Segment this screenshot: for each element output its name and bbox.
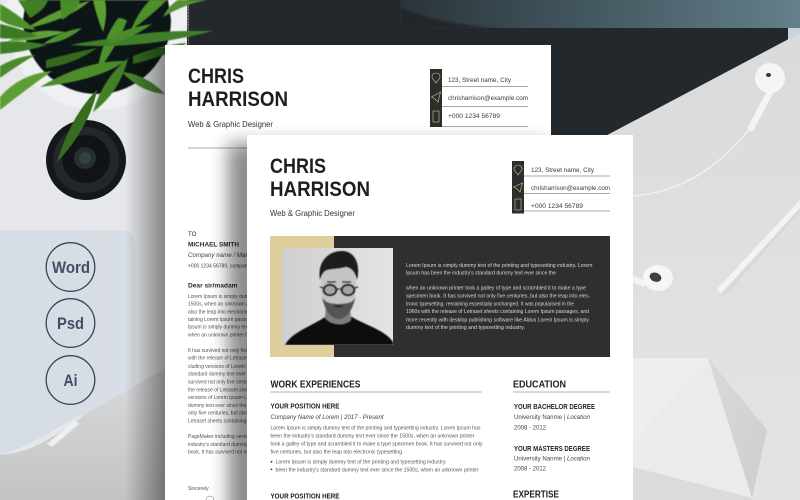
panel: front resume page bbox=[247, 135, 633, 500]
tablet sheet bbox=[0, 230, 135, 455]
lower grey sheet bbox=[0, 368, 165, 500]
job description bbox=[270, 426, 483, 455]
contact details bbox=[524, 167, 610, 211]
back page letter body: taining Lorem Ipsum passages bbox=[188, 317, 257, 323]
back page letter body: book. It has survived not only bbox=[188, 450, 253, 456]
profile banner bbox=[270, 236, 610, 357]
title: name: CHRIS bbox=[270, 155, 326, 178]
format badges bbox=[46, 243, 95, 404]
panel: back resume page bbox=[165, 45, 551, 500]
degree: masters bbox=[514, 446, 590, 472]
white paper pyramid bbox=[633, 358, 767, 500]
shadow cast by front page bbox=[228, 143, 551, 500]
back page recipient block: TO bbox=[188, 231, 197, 238]
degree: masters: University Nanme | Location bbox=[514, 456, 590, 462]
back page letter body: industry's standard dummy text bbox=[188, 442, 258, 448]
background: left white desk surface bbox=[0, 0, 165, 500]
degree: masters: YOUR MASTERS DEGREE bbox=[514, 446, 590, 453]
back page contact icon strip bbox=[430, 69, 442, 127]
badge: Word: Word bbox=[52, 259, 90, 277]
back page name bbox=[188, 65, 288, 111]
badge: Ai: Ai bbox=[64, 372, 78, 390]
education section bbox=[513, 380, 610, 500]
title: name: HARRISON bbox=[270, 178, 370, 201]
back page recipient block: +000 1234 56789, company@mail.com bbox=[188, 264, 275, 270]
back page contact details: 123, Street name, City bbox=[448, 77, 512, 84]
badge: Psd bbox=[46, 299, 95, 347]
back page letter body bbox=[188, 294, 266, 492]
back page job title: Web & Graphic Designer bbox=[188, 119, 273, 129]
back page letter body: 1500s, when an unknown printer bbox=[188, 302, 261, 308]
job description: took a galley of type and scrambled it to make a type specimen book. It has survived not only bbox=[270, 441, 483, 447]
background: light notebook on right bbox=[560, 33, 800, 500]
icon: plant in white pot bbox=[0, 0, 213, 162]
white stick bbox=[717, 200, 800, 297]
job title: Web & Graphic Designer bbox=[270, 208, 355, 218]
back page contact details: chrisharrison@example.com bbox=[448, 95, 528, 102]
profile text: tronic typesetting, remaining essentially unchanged. It was popularised in the bbox=[406, 301, 574, 307]
heading: education: EDUCATION bbox=[513, 380, 566, 390]
job description: five centuries, but also the leap into electronic typesetting. bbox=[270, 449, 404, 455]
back page letter body: Sincerely bbox=[188, 486, 209, 492]
contact details: chrisharrison@example.com bbox=[531, 185, 610, 192]
shadow left of back page bbox=[125, 48, 165, 500]
company line: Company Name of Lorem | 2017 - Present bbox=[270, 414, 384, 421]
profile text: more recently with desktop publishing software like Aldus Lorem Ipsum is simply bbox=[406, 317, 589, 323]
back page letter body: when an unknown printer took bbox=[188, 332, 255, 338]
job bullets: Lorem Ipsum is simply dummy text of the printing and typesetting industry. bbox=[276, 460, 446, 466]
earbud top bbox=[633, 63, 785, 196]
back page name: HARRISON bbox=[188, 88, 288, 111]
degree: bachelor: University Nanme | Location bbox=[514, 414, 590, 421]
job bullets: been the industry's standard dummy text ever since the 1500s, when an unknown printer bbox=[276, 467, 479, 473]
job bullets bbox=[271, 460, 479, 473]
back page letter body: with the release of Letraset sheets bbox=[188, 356, 265, 362]
profile text: specimen book. It has survived not only five centuries, but also the leap into elec- bbox=[406, 294, 590, 300]
back page contact details: +000 1234 56789 bbox=[448, 113, 500, 120]
heading: work experiences: WORK EXPERIENCES bbox=[270, 380, 361, 390]
back page recipient block: MICHAEL SMITH bbox=[188, 242, 239, 248]
back page letter body: survived not only five centuries bbox=[188, 379, 257, 385]
title: name bbox=[270, 155, 370, 201]
job description: Lorem Ipsum is simply dummy text of the printing and typesetting industry. Lorem Ipsum has bbox=[270, 426, 481, 432]
back page letter body: Lorem Ipsum is simply dummy text bbox=[188, 294, 266, 300]
back page letter body: only five centuries, but also the bbox=[188, 411, 257, 417]
back page letter body: PageMaker including versions bbox=[188, 434, 255, 440]
degree: bachelor bbox=[514, 404, 595, 432]
back page letter body: also the leap into electronic type bbox=[188, 309, 260, 315]
back page letter body: Ipsum is simply dummy text of bbox=[188, 325, 256, 331]
profile text: Ipsum has been the industry's standard dummy text ever since the bbox=[406, 270, 556, 276]
position heading: YOUR POSITION HERE bbox=[270, 404, 340, 411]
badge: Word bbox=[46, 243, 95, 291]
back page letter body: versions of Lorem Ipsum Lorem bbox=[188, 395, 258, 401]
degree: bachelor: YOUR BACHELOR DEGREE bbox=[514, 404, 595, 411]
contact details: +000 1234 56789 bbox=[531, 203, 583, 210]
back page recipient block: Company name / Manager bbox=[188, 252, 262, 259]
back page letter body: dummy text ever since the 1500s bbox=[188, 403, 262, 409]
profile text: 1960s with the release of Letraset sheets containing Lorem Ipsum passages, and bbox=[406, 309, 589, 315]
back page letter body: Letraset sheets containing Lorem bbox=[188, 419, 262, 425]
back page contact details bbox=[442, 77, 528, 126]
degree: bachelor: 2008 - 2012 bbox=[514, 424, 546, 432]
background: dark notebook and teal top band bbox=[165, 0, 800, 135]
earbud bottom bbox=[633, 265, 673, 291]
portrait photo bbox=[282, 248, 393, 345]
work experience section bbox=[270, 380, 483, 500]
badge: Ai bbox=[46, 356, 95, 404]
contact details: 123, Street name, City bbox=[531, 167, 595, 174]
profile text bbox=[405, 263, 593, 331]
back page name: CHRIS bbox=[188, 65, 244, 88]
back page recipient block bbox=[188, 231, 275, 290]
icon: camera lens bbox=[46, 90, 126, 200]
contact icon strip bbox=[512, 161, 524, 214]
job description: been the industry's standard dummy text ever since the 1500s, when an unknown printer bbox=[270, 434, 475, 440]
back page letter body: standard dummy text ever since bbox=[188, 372, 259, 378]
badge: Psd: Psd bbox=[57, 315, 84, 333]
profile text: Lorem Ipsum is simply dummy text of the printing and typesetting industry. Lorem bbox=[406, 263, 593, 269]
back page letter body: It has survived not only five cen bbox=[188, 348, 258, 354]
back page letter body: the release of Letraset sheets bbox=[188, 387, 254, 393]
back page recipient block: Dear sir/madam bbox=[188, 282, 238, 290]
back page letter body: cluding versions of Lorem Ipsum bbox=[188, 364, 260, 370]
profile text: when an unknown printer took a galley of type and scrambled it to make a type bbox=[405, 286, 586, 292]
degree: masters: 2008 - 2012 bbox=[514, 466, 546, 472]
profile text: dummy text of the printing and typesetting industry. bbox=[406, 325, 525, 331]
